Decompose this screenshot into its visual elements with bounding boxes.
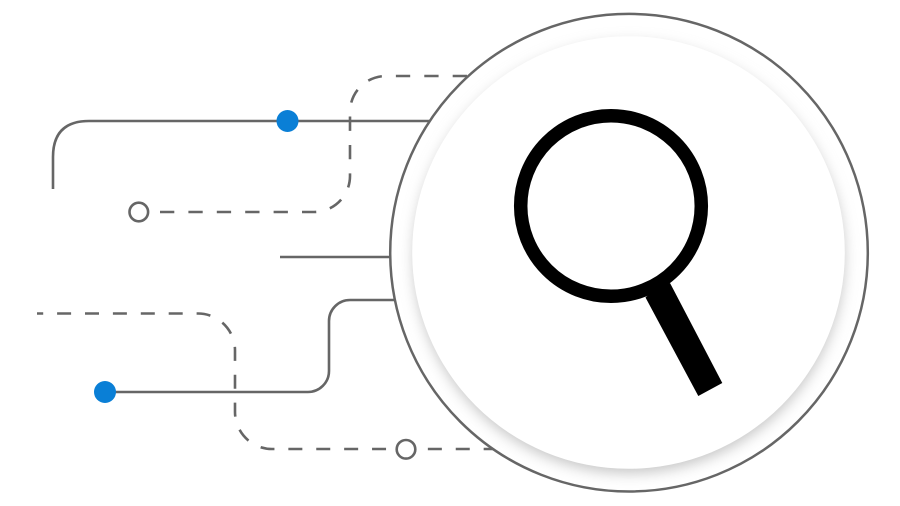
dot: blue top node [276,110,298,132]
icon: magnifying glass [521,116,722,396]
line: solid lower connector [105,300,405,392]
line: dashed top connector [160,76,480,212]
lens panel: large circle [390,14,868,492]
dot: blue lower node [94,381,116,403]
dot: hollow lower node [397,440,415,459]
dot: hollow top node [130,203,148,221]
line: solid middle connector [280,256,400,258]
line: solid top connector [53,121,440,189]
line: dashed lower connector [37,314,510,449]
